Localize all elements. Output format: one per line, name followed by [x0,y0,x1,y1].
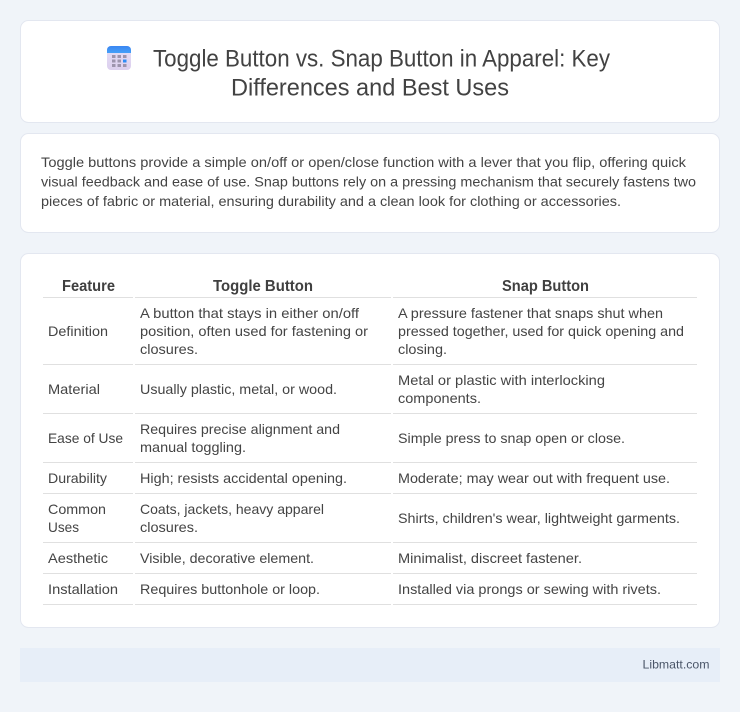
row: material: Material [48,381,100,397]
row: common uses: Uses [48,519,79,535]
title [153,46,610,102]
row: aesthetic: Minimalist, discreet fastener. [398,550,582,566]
footer: Libmatt.com [642,658,710,672]
row: installation [48,581,661,597]
row: definition: closures. [140,341,198,357]
title panel [20,20,720,122]
row: ease of use: Ease of Use [48,430,123,446]
row: aesthetic: Visible, decorative element. [140,550,314,566]
row: material: Metal or plastic with interlocking [398,372,605,388]
row: common uses [48,501,680,535]
intro text [41,154,696,209]
row: ease of use: manual toggling. [140,439,246,455]
row: common uses: closures. [140,519,198,535]
panel: comparison table [20,254,720,628]
icon: calendar [107,46,131,70]
row: aesthetic [48,550,582,566]
intro text: pieces of fabric or material, ensuring durability and a clean look for clothing or accessories. [41,193,621,209]
row: definition: position, often used for fastening or [140,323,368,339]
row: ease of use [48,421,625,455]
row: material: components. [398,390,481,406]
title: Differences and Best Uses [231,74,509,102]
row: definition: pressed together, used for quick opening and [398,323,684,339]
table header: Snap Button [502,278,589,295]
row: durability: Durability [48,470,107,486]
row: common uses: Shirts, children's wear, lightweight garments. [398,510,680,526]
table header: Feature [62,278,115,295]
intro text: visual feedback and ease of use. Snap buttons rely on a pressing mechanism that securely fastens two [41,174,696,190]
row: ease of use: Simple press to snap open or close. [398,430,625,446]
row: common uses: Common [48,501,106,517]
row: definition: closing. [398,341,447,357]
row: installation: Installation [48,581,118,597]
row: ease of use: Requires precise alignment and [140,421,340,437]
row: definition: A button that stays in either on/off [140,305,359,321]
table header [62,278,589,295]
row: durability: Moderate; may wear out with frequent use. [398,470,670,486]
table header: Toggle Button [213,278,313,295]
row: common uses: Coats, jackets, heavy apparel [140,501,324,517]
row: definition [48,305,684,357]
row: installation: Requires buttonhole or loop. [140,581,320,597]
row: definition: Definition [48,323,108,339]
title: Toggle Button vs. Snap Button in Apparel: Key [153,46,610,72]
panel: introduction [20,134,720,232]
row: definition: A pressure fastener that snaps shut when [398,305,663,321]
row: installation: Installed via prongs or sewing with rivets. [398,581,661,597]
row: material [48,372,605,406]
row: durability [48,470,670,486]
intro text: Toggle buttons provide a simple on/off or open/close function with a lever that you flip, offering quick [41,154,687,170]
row: aesthetic: Aesthetic [48,550,108,566]
row: durability: High; resists accidental opening. [140,470,347,486]
row: material: Usually plastic, metal, or wood. [140,381,337,397]
footer [20,648,720,682]
